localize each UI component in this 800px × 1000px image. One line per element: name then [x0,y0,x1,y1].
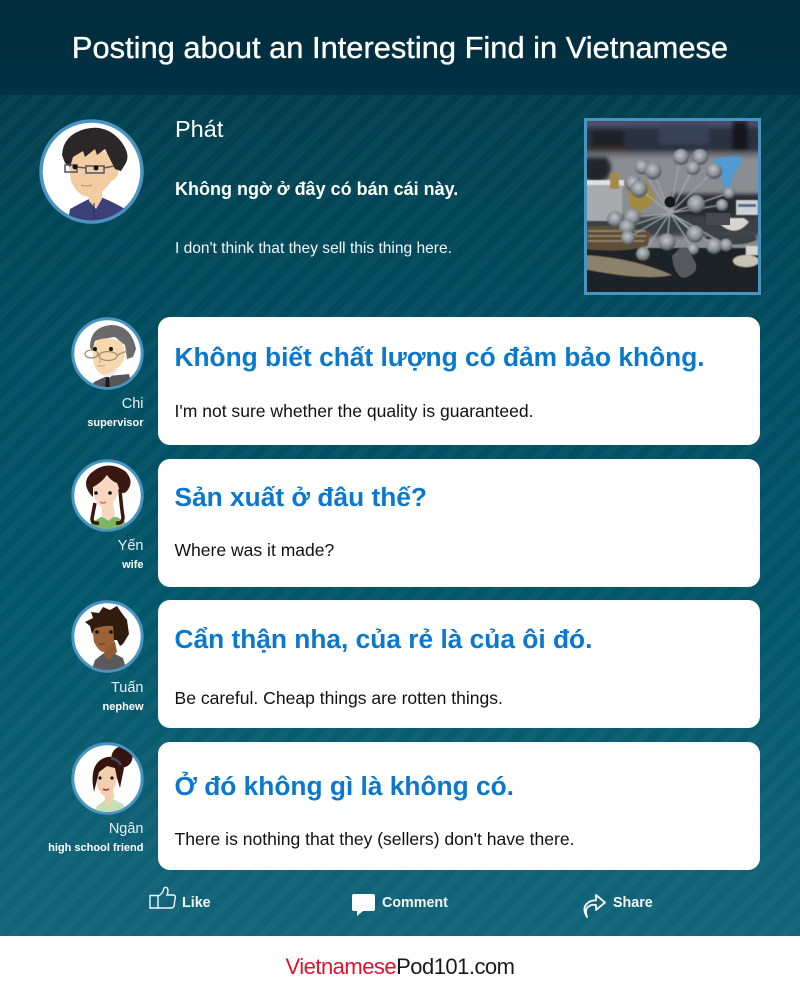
relation: nephew: nephew [103,701,144,713]
name: Tuấn: Tuấn [111,680,144,696]
card: Yến [158,459,760,587]
title: Posting about an Interesting Find in Vietnamese [72,30,728,65]
comment: Tuấn [71,600,760,728]
avatar: Ngân [71,742,144,815]
label: Like: Like [182,895,211,911]
comment: Chi [71,317,760,445]
English text: There is nothing that they (sellers) don't have there. [174,829,574,849]
name: Chi: Chi [122,396,144,412]
Vietnamese text: Ở đó không gì là không có. [174,771,514,801]
Vietnamese text: Cẩn thận nha, của rẻ là của ôi đó. [174,624,592,654]
card: Ngân [158,742,760,870]
English text: I'm not sure whether the quality is guaranteed. [174,401,534,421]
relation: wife: wife [122,559,144,571]
footer band [0,936,800,1000]
avatar: Yến [71,459,144,532]
name: Yến: Yến [118,538,144,554]
comment: Yến [71,459,760,587]
icon: like [149,886,176,909]
avatar: Chi [71,317,144,390]
relation: high school friend: high school friend [48,842,144,854]
logo: VietnamesePod101.com [286,954,514,979]
avatar: Tuấn [71,600,144,673]
poster name: Phát [175,116,223,142]
card: Chi [158,317,760,445]
Vietnamese text: Sản xuất ở đâu thế? [174,482,427,512]
icon: comment [352,894,375,916]
poster Vietnamese post: Không ngờ ở đây có bán cái này. [175,179,458,199]
relation: supervisor: supervisor [87,417,144,429]
label: Comment: Comment [382,895,448,911]
English text: Where was it made? [174,540,334,560]
comment: Ngân [48,742,760,870]
avatar: Phát [39,119,144,224]
poster English translation: I don't think that they sell this thing here. [175,240,452,257]
photo: flea market sphere ornament [584,118,761,295]
label: Share: Share [613,895,653,911]
name: Ngân: Ngân [109,821,144,837]
header bar [0,0,800,95]
icon: share [584,894,606,918]
Vietnamese text: Không biết chất lượng có đảm bảo không. [174,342,705,372]
English text: Be careful. Cheap things are rotten things. [174,688,503,708]
card: Tuấn [158,600,760,728]
